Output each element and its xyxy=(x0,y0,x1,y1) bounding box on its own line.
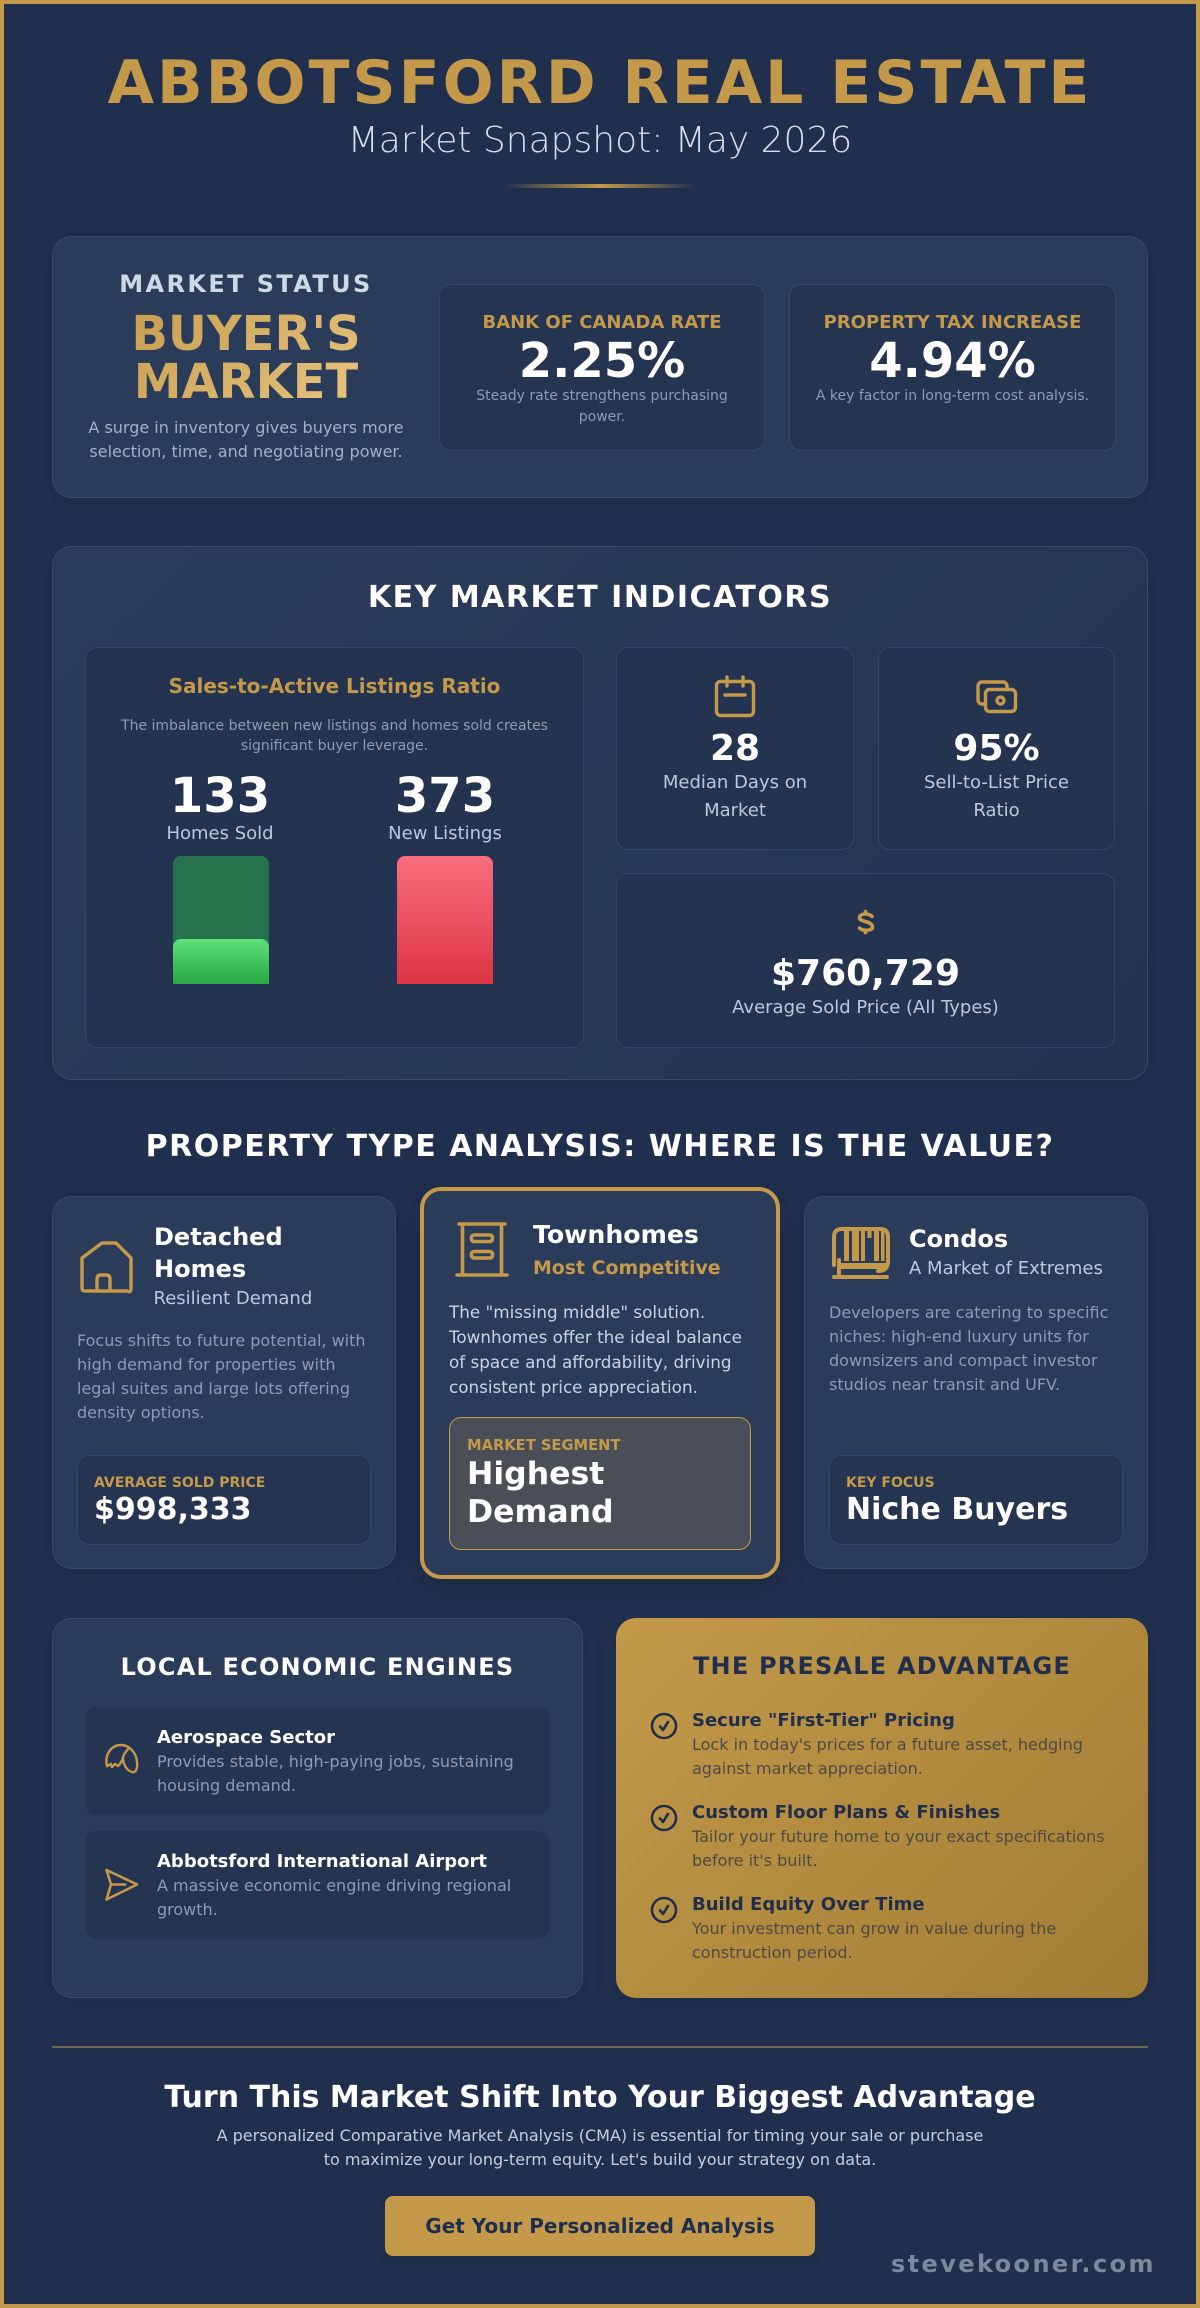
property description: niches: high-end luxury units for xyxy=(829,1327,1089,1346)
property title: Detached xyxy=(154,1223,283,1251)
panel heading: THE PRESALE ADVANTAGE xyxy=(693,1652,1071,1680)
benefit description xyxy=(692,1919,1056,1962)
property description: Townhomes offer the ideal balance xyxy=(449,1327,742,1347)
kpi label: Average Sold Price (All Types) xyxy=(732,997,999,1018)
benefit: first-tier pricing xyxy=(650,1710,1083,1778)
panel: condos xyxy=(804,1196,1148,1569)
benefit description: Tailor your future home to your exact specifications xyxy=(692,1827,1105,1846)
kpi label: Sell-to-List Price xyxy=(924,772,1069,793)
call to action heading: Turn This Market Shift Into Your Biggest Advantage xyxy=(164,2080,1036,2115)
item title: Aerospace Sector xyxy=(157,1727,335,1748)
new listings number: 373 xyxy=(395,768,495,824)
homes sold bar xyxy=(173,856,269,984)
new listings label: New Listings xyxy=(388,823,502,844)
subtitle: Market Snapshot: May 2026 xyxy=(348,120,852,161)
homes sold bar fill xyxy=(173,939,269,984)
title: ABBOTSFORD REAL ESTATE xyxy=(108,48,1092,118)
stat note: power. xyxy=(579,408,625,424)
benefit description: Your investment can grow in value during the xyxy=(692,1919,1056,1938)
property description: studios near transit and UFV. xyxy=(829,1375,1060,1394)
property description: downsizers and compact investor xyxy=(829,1351,1098,1370)
property description: legal suites and large lots offering xyxy=(77,1379,350,1398)
kpi label xyxy=(924,772,1069,821)
icon: townhome xyxy=(455,1222,509,1277)
property description: The "missing middle" solution. xyxy=(449,1302,705,1322)
market status description xyxy=(88,418,404,461)
benefit description: before it's built. xyxy=(692,1851,818,1870)
watermark: stevekooner.com xyxy=(891,2250,1156,2278)
metric label: KEY FOCUS xyxy=(846,1475,935,1491)
icon: check xyxy=(650,1896,678,1924)
property description: consistent price appreciation. xyxy=(449,1377,698,1397)
market status description: A surge in inventory gives buyers more xyxy=(88,418,404,437)
call to action button: Get Your Personalized Analysis xyxy=(425,2214,775,2238)
panel: key market indicators xyxy=(52,546,1148,1080)
panel: local economic engines xyxy=(52,1618,583,1998)
metric value: Demand xyxy=(467,1494,614,1530)
property subtitle: Resilient Demand xyxy=(154,1288,312,1309)
stat: bank of canada rate xyxy=(439,284,765,451)
benefit title: Custom Floor Plans & Finishes xyxy=(692,1802,1000,1823)
metric box xyxy=(449,1417,751,1550)
call to action text: A personalized Comparative Market Analysis (CMA) is essential for timing your sale or purchase xyxy=(217,2126,983,2145)
item description: Provides stable, high-paying jobs, sustaining xyxy=(157,1752,514,1771)
property description: high demand for properties with xyxy=(77,1355,336,1374)
metric value xyxy=(467,1456,614,1530)
kpi label: Ratio xyxy=(973,800,1020,821)
icon: paper plane xyxy=(105,1868,138,1901)
property subtitle: A Market of Extremes xyxy=(909,1258,1103,1279)
ratio description: The imbalance between new listings and homes sold creates xyxy=(121,718,548,734)
item: abbotsford international airport xyxy=(85,1831,550,1939)
kpi value: 28 xyxy=(710,728,760,769)
benefit description xyxy=(692,1735,1083,1778)
property description: density options. xyxy=(77,1403,205,1422)
benefit title: Secure "First-Tier" Pricing xyxy=(692,1710,955,1731)
metric box xyxy=(77,1455,371,1545)
item: aerospace sector xyxy=(85,1707,550,1815)
stat note: Steady rate strengthens purchasing xyxy=(476,388,728,404)
stat: property tax increase xyxy=(789,284,1116,451)
stat note: A key factor in long-term cost analysis. xyxy=(816,388,1089,404)
benefit description: against market appreciation. xyxy=(692,1759,923,1778)
homes sold number: 133 xyxy=(170,768,270,824)
ratio description xyxy=(121,718,548,754)
item description xyxy=(157,1876,511,1919)
panel: sales-to-active ratio xyxy=(85,647,584,1048)
item description xyxy=(157,1752,514,1795)
stat label: PROPERTY TAX INCREASE xyxy=(824,312,1081,333)
new listings column xyxy=(388,768,502,984)
kpi label: Market xyxy=(704,800,766,821)
header divider xyxy=(504,184,696,188)
kpi value: $760,729 xyxy=(771,953,960,994)
kpi: average sold price xyxy=(616,873,1115,1048)
header xyxy=(108,48,1092,188)
metric label: AVERAGE SOLD PRICE xyxy=(94,1475,265,1491)
property title: Condos xyxy=(909,1225,1008,1253)
kpi: sell-to-list price ratio xyxy=(878,647,1115,850)
property title xyxy=(154,1223,283,1283)
icon: aerospace xyxy=(105,1744,138,1774)
property title: Homes xyxy=(154,1255,246,1283)
property description: Developers are catering to specific xyxy=(829,1303,1108,1322)
new listings bar xyxy=(397,856,493,984)
benefit: custom floor plans xyxy=(650,1802,1105,1870)
market status description: selection, time, and negotiating power. xyxy=(89,442,403,461)
market status label: MARKET STATUS xyxy=(119,270,373,298)
section heading: property type analysis: PROPERTY TYPE ANALYSIS: WHERE IS THE VALUE? xyxy=(146,1129,1054,1164)
metric value: Niche Buyers xyxy=(846,1492,1068,1527)
section heading: KEY MARKET INDICATORS xyxy=(368,580,832,614)
property description xyxy=(448,1302,742,1397)
property description: of space and affordability, driving xyxy=(449,1352,732,1372)
icon: check xyxy=(650,1712,678,1740)
kpi label: Median Days on xyxy=(663,772,807,793)
icon: house xyxy=(80,1241,133,1294)
metric label: MARKET SEGMENT xyxy=(467,1437,620,1454)
property description xyxy=(77,1331,366,1422)
stat value: 2.25% xyxy=(519,333,685,389)
footer divider xyxy=(52,2046,1148,2048)
kpi: median days on market xyxy=(616,647,854,850)
property subtitle: Most Competitive xyxy=(533,1256,721,1278)
benefit title: Build Equity Over Time xyxy=(692,1894,925,1915)
item description: A massive economic engine driving regional xyxy=(157,1876,511,1895)
benefit description xyxy=(692,1827,1105,1870)
call to action button xyxy=(385,2196,815,2256)
icon: calendar xyxy=(714,675,756,718)
panel: townhomes (featured) xyxy=(420,1187,780,1579)
property description xyxy=(829,1303,1108,1394)
icon: check xyxy=(650,1804,678,1832)
panel heading: LOCAL ECONOMIC ENGINES xyxy=(121,1653,514,1681)
metric value: Highest xyxy=(467,1456,604,1492)
icon: condo xyxy=(832,1227,890,1279)
ratio heading: Sales-to-Active Listings Ratio xyxy=(169,674,500,698)
property title: Townhomes xyxy=(533,1220,699,1249)
benefit: build equity xyxy=(650,1894,1056,1962)
benefit description: construction period. xyxy=(692,1943,853,1962)
icon: dollar xyxy=(858,910,874,934)
buyer's market headline: MARKET xyxy=(134,354,358,410)
homes sold label: Homes Sold xyxy=(166,823,274,844)
metric box xyxy=(829,1455,1123,1545)
stat value: 4.94% xyxy=(869,333,1036,389)
call to action text: to maximize your long-term equity. Let's build your strategy on data. xyxy=(324,2150,876,2169)
item description: housing demand. xyxy=(157,1776,296,1795)
homes sold column xyxy=(166,768,274,984)
footer xyxy=(52,2046,1156,2278)
call to action text xyxy=(216,2126,983,2169)
item description: growth. xyxy=(157,1900,218,1919)
icon: cash xyxy=(976,680,1018,714)
buyer's market headline xyxy=(86,310,406,406)
property description: Focus shifts to future potential, with xyxy=(77,1331,366,1350)
benefit description: Lock in today's prices for a future asset, hedging xyxy=(692,1735,1083,1754)
panel: the presale advantage xyxy=(616,1618,1148,1998)
stat label: BANK OF CANADA RATE xyxy=(482,312,722,333)
panel: detached homes xyxy=(52,1196,396,1569)
metric value: $998,333 xyxy=(94,1492,252,1527)
item title: Abbotsford International Airport xyxy=(157,1851,487,1872)
kpi label xyxy=(663,772,807,821)
stat note xyxy=(476,388,728,424)
kpi value: 95% xyxy=(953,728,1040,769)
ratio description: significant buyer leverage. xyxy=(241,738,428,754)
panel: market status xyxy=(52,236,1148,498)
buyer's market headline: BUYER'S xyxy=(131,306,361,362)
